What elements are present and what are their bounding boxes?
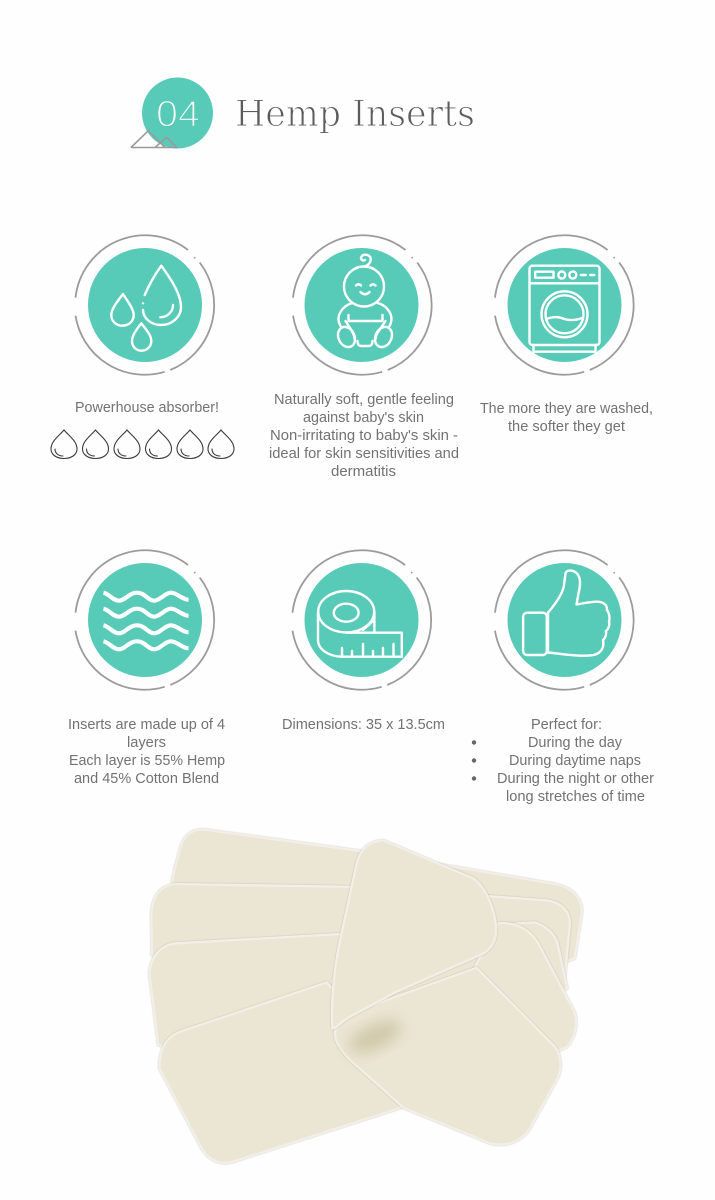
- text: layers: and 45% Cotton Blend: [74, 771, 219, 787]
- panel: layers: [68, 550, 225, 787]
- panel: softness: [269, 235, 459, 480]
- panel: perfect for: [472, 550, 654, 805]
- text: layers: Inserts are made up of 4: [68, 717, 225, 733]
- icon: baby: [293, 235, 432, 375]
- text: softness: [269, 392, 459, 480]
- text: powerhouse absorber: Powerhouse absorber!: [75, 400, 219, 416]
- text: perfect for list: During the night or other: [497, 771, 654, 787]
- icon: waves: [76, 550, 214, 690]
- text: perfect for list: long stretches of time: [506, 789, 645, 805]
- text: perfect for list: [472, 717, 654, 805]
- text: softer when washed: [480, 401, 653, 435]
- text: softer when washed: the softer they get: [508, 419, 625, 435]
- icon: measuring tape: [292, 550, 431, 690]
- rating: six drops: [51, 430, 234, 458]
- text: softness: Non-irritating to baby's skin -: [270, 428, 458, 444]
- text: softness: dermatitis: [331, 464, 396, 480]
- text: perfect for list: During daytime naps: [509, 753, 641, 769]
- text: layers: layers: [127, 735, 166, 751]
- icon: water drops: [76, 235, 214, 375]
- text: perfect for list: Perfect for:: [531, 717, 602, 733]
- text: softer when washed: The more they are washed,: [480, 401, 653, 417]
- text: softness: ideal for skin sensitivities and: [269, 446, 459, 462]
- icon: thumbs up: [495, 550, 634, 690]
- text: layers: Each layer is 55% Hemp: [69, 753, 225, 769]
- text: dimensions: Dimensions: 35 x 13.5cm: [282, 717, 445, 733]
- panel: absorbency: [51, 235, 234, 458]
- text: perfect for list: During the day: [528, 735, 623, 751]
- text: softness: Naturally soft, gentle feeling: [274, 392, 454, 408]
- text: layers: [68, 717, 225, 787]
- text: softness: against baby's skin: [303, 410, 424, 426]
- title: Hemp Inserts: [235, 94, 475, 135]
- icon: washing machine: [495, 235, 634, 375]
- panel: washing: [480, 235, 653, 435]
- product photo: hemp inserts: [149, 829, 582, 1163]
- header badge: [131, 78, 213, 148]
- header badge: 04: [156, 94, 200, 134]
- panel: dimensions: [282, 550, 445, 733]
